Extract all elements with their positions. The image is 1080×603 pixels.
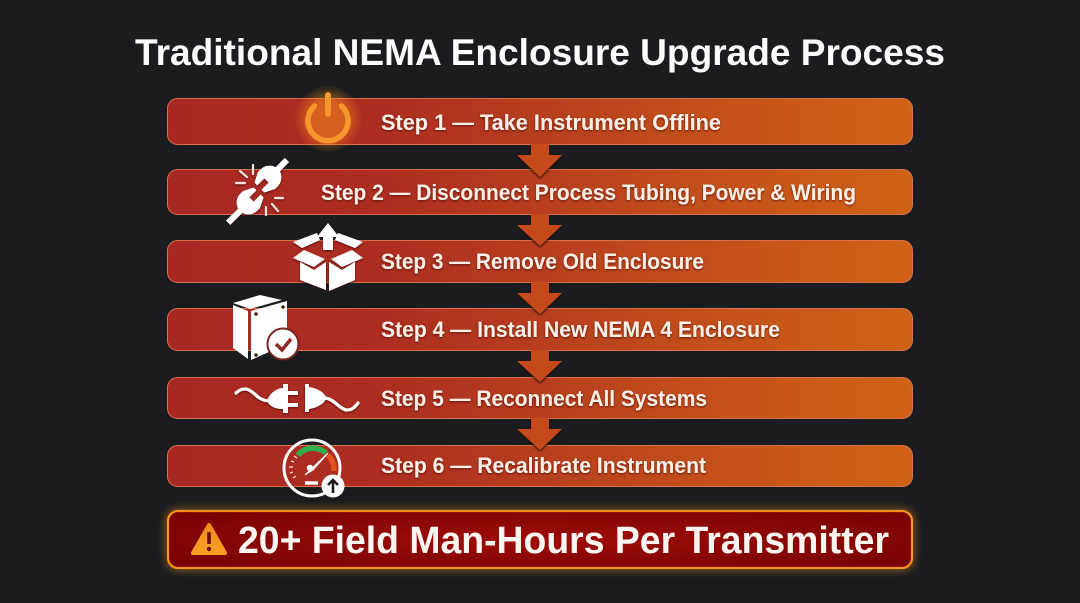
- title: Traditional NEMA Enclosure Upgrade Process: [135, 32, 945, 73]
- icon: box with arrow: [293, 223, 363, 291]
- panel: step 4: [168, 295, 912, 360]
- arrow: step 1 to 2: [517, 144, 562, 177]
- step 4 label: Step 4 — Install New NEMA 4 Enclosure: [381, 317, 780, 342]
- step 5 label: Step 5 — Reconnect All Systems: [381, 386, 707, 411]
- icon: disconnected plug: [220, 152, 295, 231]
- icon: power: [294, 85, 362, 153]
- callout text: 20+ Field Man-Hours Per Transmitter: [238, 520, 889, 562]
- callout: man-hours: [168, 511, 912, 568]
- arrow: step 4 to 5: [517, 350, 562, 382]
- arrow: step 5 to 6: [517, 418, 562, 450]
- icon: warning triangle: [193, 525, 225, 553]
- icon: plugs reconnecting: [236, 384, 358, 413]
- icon: gauge: [284, 440, 344, 498]
- icon: enclosure with check: [233, 295, 298, 360]
- step 2 label: Step 2 — Disconnect Process Tubing, Power & Wiring: [321, 180, 856, 205]
- arrow: step 3 to 4: [517, 282, 562, 314]
- arrow: step 2 to 3: [517, 214, 562, 246]
- step 1 label: Step 1 — Take Instrument Offline: [381, 110, 721, 135]
- step 6 label: Step 6 — Recalibrate Instrument: [381, 453, 707, 478]
- panel: step 6: [168, 440, 912, 498]
- step 3 label: Step 3 — Remove Old Enclosure: [381, 249, 704, 274]
- panel: step 1: [168, 85, 912, 153]
- panel: step 5: [168, 378, 912, 418]
- panel: step 2: [168, 152, 912, 231]
- panel: step 3: [168, 223, 912, 291]
